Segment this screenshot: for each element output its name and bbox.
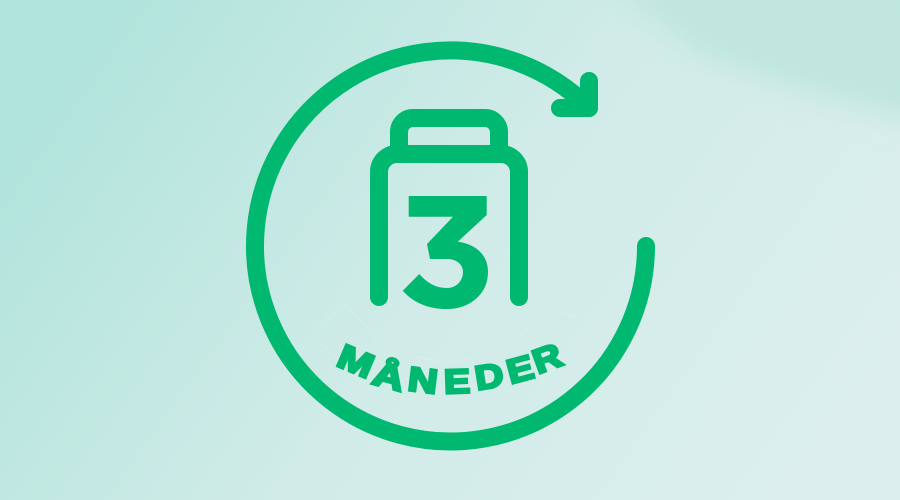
label: months: E [503, 348, 538, 391]
label: months: M [332, 337, 379, 386]
jar lid [399, 118, 499, 154]
label: months: Å [369, 354, 409, 399]
label: months: D [472, 355, 506, 397]
faint outline behind label [320, 305, 580, 383]
label: months: E [443, 362, 471, 401]
jar body [379, 154, 519, 297]
label: months: R [527, 336, 567, 381]
icon: jar [379, 118, 519, 297]
label: months: N [406, 360, 440, 401]
icon: circular arrow [255, 50, 646, 441]
number 3 [403, 196, 488, 309]
label: months [332, 336, 567, 401]
